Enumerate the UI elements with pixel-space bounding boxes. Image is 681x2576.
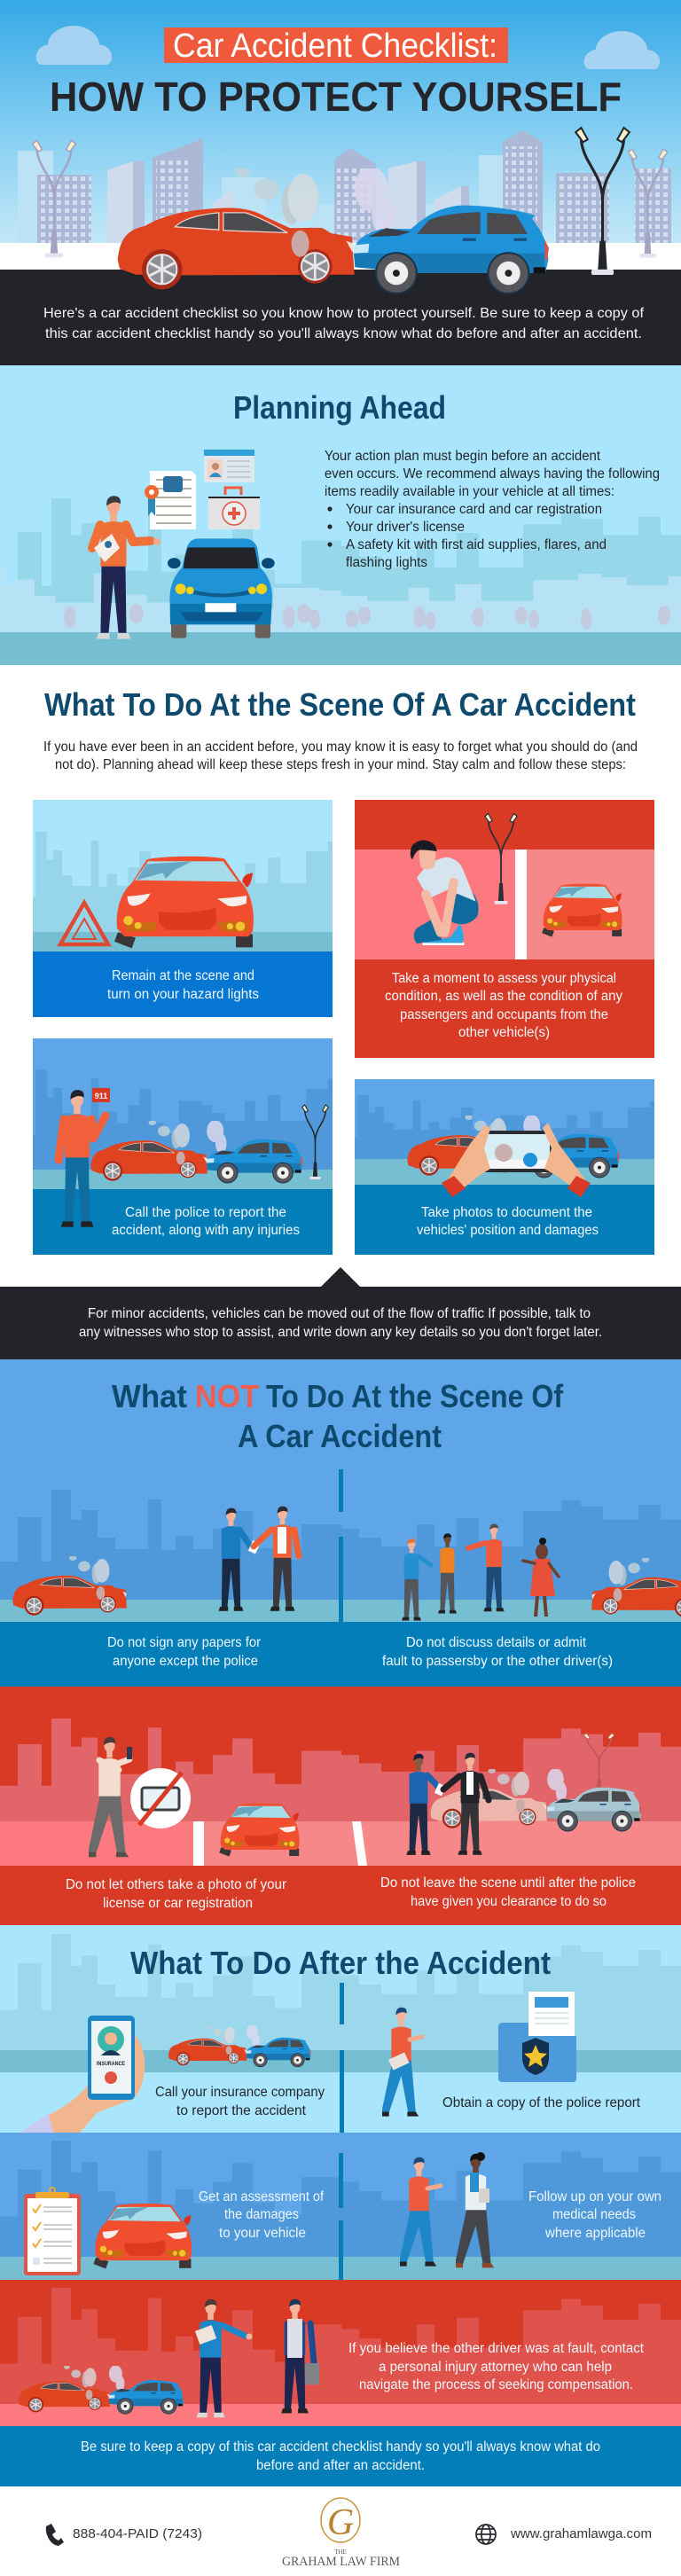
intro paragraph: not do). Planning ahead will keep these steps fresh in your mind. Stay calm and follow these steps:: [55, 757, 626, 772]
body text: Your driver's license: [346, 520, 465, 535]
red car front: [93, 2204, 192, 2269]
road: [0, 270, 681, 365]
caption left: to your vehicle: [219, 2226, 306, 2241]
man with tablet: [195, 2299, 252, 2417]
title banner: Car Accident Checklist:: [173, 27, 497, 65]
panel: call the police: [6, 1038, 396, 1255]
trees: [64, 604, 670, 630]
heading: To Do At the Scene Of: [266, 1378, 564, 1414]
caption: navigate the process of seeking compensation.: [359, 2377, 633, 2392]
body text: items readily available in your vehicle at all times:: [325, 484, 614, 499]
icon: police report folder: [498, 1992, 576, 2082]
caption: turn on your hazard lights: [107, 987, 259, 1002]
panel: remain at the scene: [6, 800, 396, 1017]
caption right: fault to passersby or the other driver(s): [382, 1654, 613, 1669]
caption left: Get an assessment of: [199, 2189, 325, 2204]
caption right: have given you clearance to do so: [411, 1894, 607, 1909]
website: www.grahamlawga.com: [510, 2526, 652, 2541]
caption: [385, 971, 622, 1040]
two men with papers: [219, 1507, 299, 1611]
caption: passengers and occupants from the: [400, 1007, 608, 1022]
heading: What: [112, 1378, 187, 1414]
caption: vehicles' position and damages: [417, 1223, 599, 1238]
divider: [339, 2153, 343, 2280]
red car right: [591, 1557, 681, 1617]
street lamp right small: [628, 149, 668, 258]
logo: [282, 2498, 400, 2569]
crashed cars: [90, 1120, 303, 1184]
cloud left: [36, 26, 112, 65]
crashed cars: [19, 2365, 184, 2415]
man in suit: [281, 2299, 319, 2413]
caption: a personal injury attorney who can help: [379, 2360, 612, 2375]
small red car: [542, 884, 622, 937]
caption right: Do not leave the scene until after the police: [380, 1875, 636, 1891]
hero section: [0, 0, 681, 365]
caption left: [107, 1635, 261, 1669]
intro text: Here's a car accident checklist so you know how to protect yourself. Be sure to keep a copy of: [43, 306, 645, 321]
heading: [112, 1378, 564, 1454]
warning triangle: [60, 903, 108, 944]
caption: Take a moment to assess your physical: [392, 971, 616, 986]
red car left: [12, 1555, 127, 1616]
callout: minor accidents: [0, 1267, 681, 1359]
icon: clipboard: [24, 2188, 81, 2275]
panel: take photos: [328, 1079, 681, 1255]
group of bystanders: [402, 1523, 559, 1620]
person with documents: [92, 496, 160, 639]
caption right: medical needs: [552, 2207, 636, 2222]
intro text: [43, 306, 645, 341]
intro text: this car accident checklist handy so you'll always know what do before and after an accident.: [45, 326, 642, 341]
street lamp large: [575, 128, 630, 275]
road strips: [193, 1821, 367, 1866]
divider: [340, 1983, 344, 2133]
caption: accident, along with any injuries: [112, 1223, 300, 1238]
body text: Your car insurance card and car registration: [346, 502, 602, 517]
city buildings: [18, 130, 671, 243]
divider: [339, 1469, 343, 1622]
hands holding tablet: [442, 1123, 591, 1197]
caption left: anyone except the police: [113, 1654, 258, 1669]
icon: certificate: [145, 471, 196, 529]
caption: Call the police to report the: [125, 1205, 286, 1220]
caption right: Obtain a copy of the police report: [442, 2095, 641, 2110]
panel: what not to do red: [0, 1687, 681, 1925]
caption right: [382, 1635, 613, 1669]
caption right: Follow up on your own: [528, 2189, 661, 2204]
caption left: [66, 1877, 286, 1911]
caption: Take photos to document the: [421, 1205, 592, 1220]
caption left: [199, 2189, 325, 2241]
street lamp: [302, 1105, 328, 1179]
street lamp left: [33, 140, 75, 257]
intro paragraph: If you have ever been in an accident before, you may know it is easy to forget what you should do (and: [43, 740, 638, 755]
blue car front view: [168, 538, 275, 638]
section heading: what to do: [0, 665, 681, 1339]
person walking: [379, 2008, 422, 2117]
caption left: Do not let others take a photo of your: [66, 1877, 286, 1892]
person and doctor: [396, 2152, 494, 2267]
icon: phone: [46, 2524, 64, 2546]
caption right: Do not discuss details or admit: [406, 1635, 587, 1650]
panel: what not to do blue: [0, 1359, 681, 1687]
crashed cars: [407, 1115, 620, 1178]
panel: assess condition: [355, 800, 654, 1058]
caption: [107, 968, 259, 1002]
red car front: [219, 1804, 300, 1857]
footer: [0, 2486, 681, 2576]
caption left: license or car registration: [103, 1896, 253, 1911]
closing banner: [0, 2426, 681, 2486]
caption: Remain at the scene and: [112, 968, 254, 983]
person calling: [59, 1088, 110, 1227]
caption left: the damages: [224, 2207, 299, 2222]
hand with phone: INSURANCE: [97, 2062, 125, 2067]
caption left: [155, 2085, 325, 2118]
logo: THE: [334, 2549, 347, 2556]
hand with phone: [20, 2016, 145, 2133]
body text: [325, 449, 660, 570]
icon: ID card: [204, 450, 254, 482]
intro paragraph: [43, 740, 638, 772]
caption left: Call your insurance company: [155, 2085, 325, 2100]
caption left: Do not sign any papers for: [107, 1635, 261, 1650]
body text: Your action plan must begin before an accident: [325, 449, 601, 464]
person crouching: [411, 840, 479, 945]
callout: minor accidents: any witnesses who stop to assist, and write down any key details so you don't forget later.: [79, 1325, 602, 1340]
crashed red car: [118, 167, 355, 289]
street lamp: [485, 813, 517, 904]
caption right: [528, 2189, 661, 2241]
caption: other vehicle(s): [458, 1025, 550, 1040]
caption: [348, 2341, 645, 2392]
red car front: [114, 857, 254, 948]
callout: minor accidents: For minor accidents, vehicles can be moved out of the flow of traffic If possible, talk to: [88, 1306, 591, 1321]
panel: attorney row: [0, 2280, 681, 2426]
heading: NOT: [195, 1378, 259, 1414]
body text: even occurs. We recommend always having the following: [325, 466, 660, 482]
phone number: 888-404-PAID (7243): [73, 2526, 202, 2541]
person calling: 911: [95, 1092, 107, 1100]
caption right: where applicable: [544, 2226, 646, 2241]
crashed blue car: [354, 167, 549, 294]
main title: HOW TO PROTECT YOURSELF: [50, 74, 622, 120]
logo: GRAHAM LAW FIRM: [282, 2555, 400, 2569]
section heading: what to do: What To Do At the Scene Of A Car Accident: [44, 686, 636, 723]
no photo sign: [130, 1768, 191, 1828]
panel: planning ahead: [0, 365, 681, 665]
panel: after the accident insurance row: [0, 1925, 681, 2133]
woman taking photo: [84, 1737, 132, 1857]
caption left: to report the accident: [176, 2103, 307, 2118]
faded street lamp: [583, 1734, 614, 1793]
heading: A Car Accident: [238, 1418, 442, 1454]
heading: Planning Ahead: [233, 389, 446, 426]
officer and man: [406, 1753, 489, 1855]
heading: What To Do After the Accident: [130, 1945, 551, 1981]
cloud right: [584, 31, 660, 69]
body text: flashing lights: [346, 555, 427, 570]
body text: A safety kit with first aid supplies, flares, and: [346, 537, 607, 552]
crashed faded cars: [430, 1768, 642, 1832]
crashed cars: [168, 2024, 311, 2067]
caption: [112, 1205, 300, 1238]
panel: assessment row: [0, 2133, 681, 2280]
closing banner: Be sure to keep a copy of this car accident checklist handy so you'll always know what do: [81, 2439, 600, 2455]
logo: G: [327, 2502, 354, 2543]
caption: [417, 1205, 599, 1238]
closing banner: before and after an accident.: [256, 2458, 425, 2473]
caption right: [380, 1875, 636, 1909]
icon: globe: [476, 2525, 496, 2544]
icon: first aid kit: [208, 488, 260, 529]
caption: If you believe the other driver was at fault, contact: [348, 2341, 645, 2356]
caption: condition, as well as the condition of any: [385, 989, 622, 1004]
